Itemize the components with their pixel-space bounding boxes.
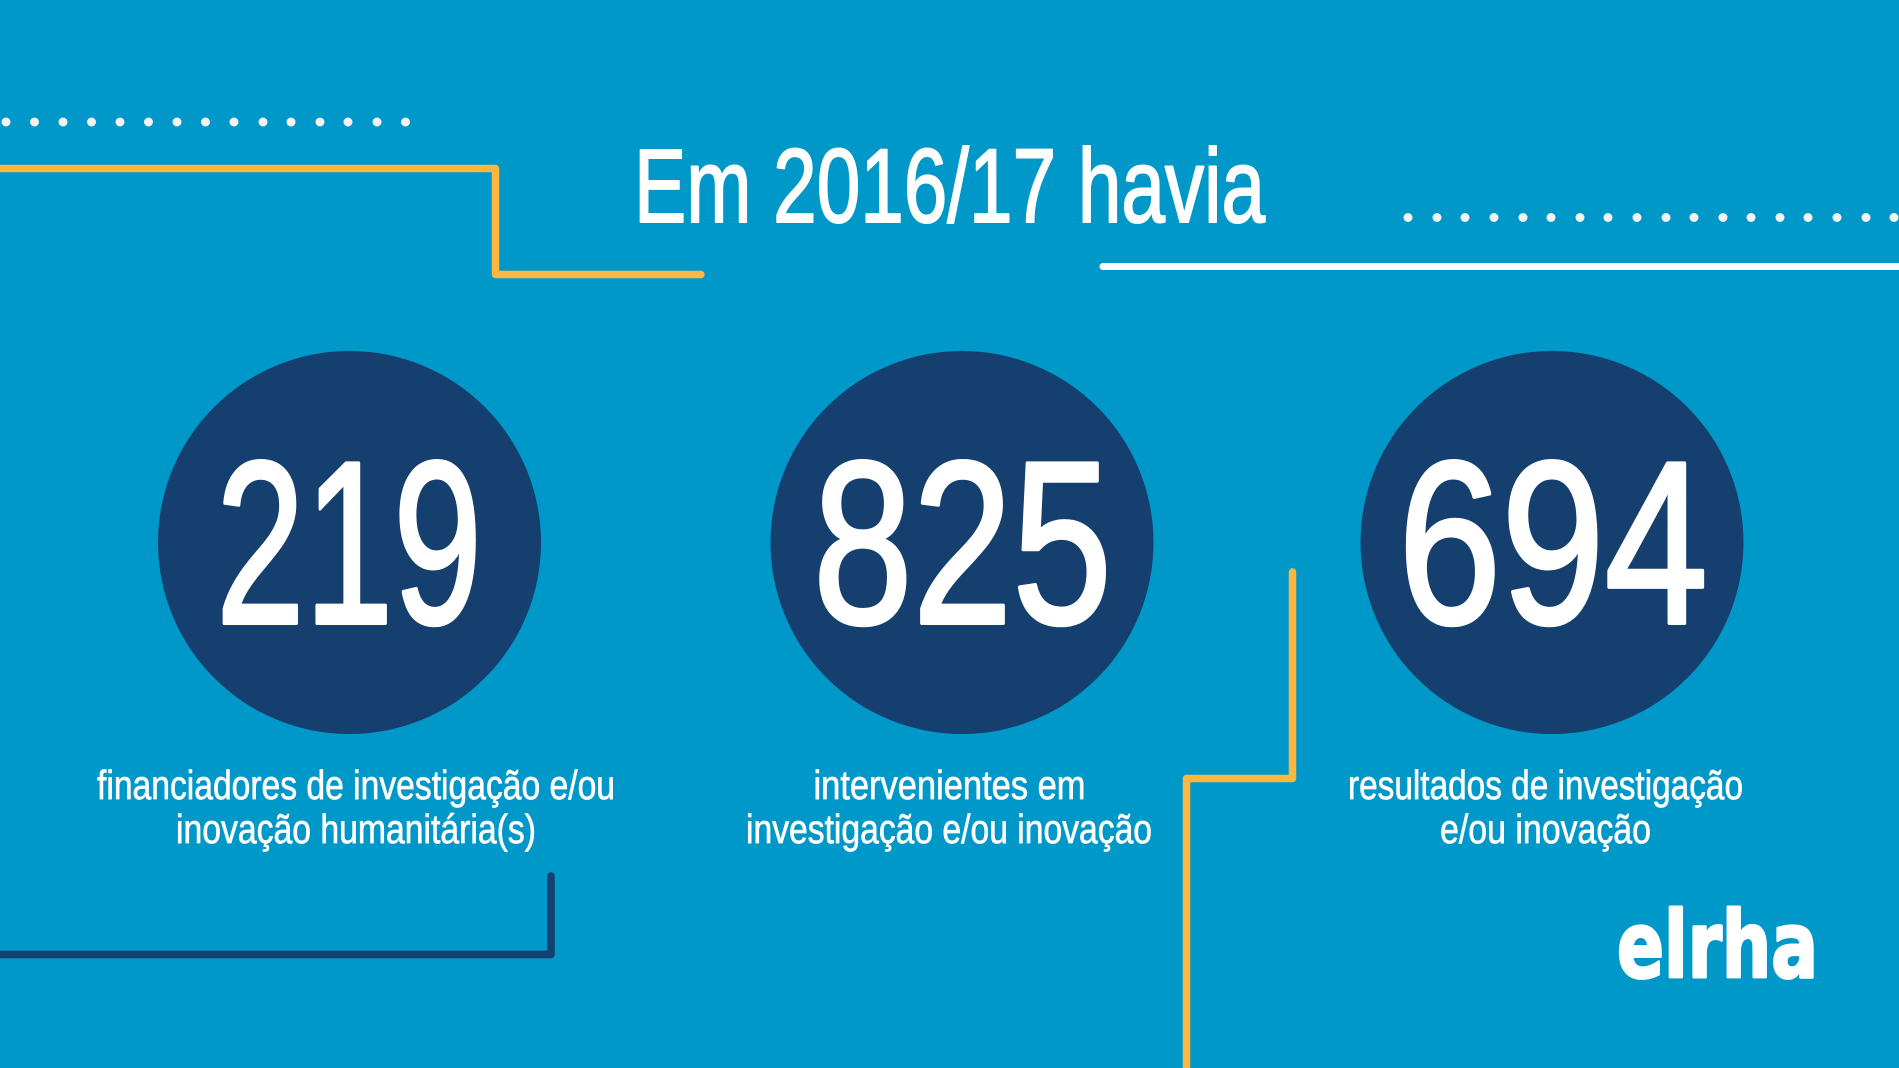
stat: 825 actors — [746, 351, 1154, 852]
circle: 825 — [770, 351, 1154, 734]
number: 694: 694 — [1398, 414, 1708, 673]
label: funders: financiadores de investigação e/ou — [97, 762, 615, 808]
label: outputs: resultados de investigação — [1348, 762, 1743, 808]
circle: 219 — [158, 351, 541, 734]
stat: 694 outputs — [1348, 351, 1744, 852]
logo: elrha: elrha — [1617, 892, 1818, 999]
title: Em 2016/17 havia — [634, 128, 1265, 245]
number: 825: 825 — [813, 414, 1112, 673]
white line: top right — [1103, 263, 1899, 270]
decorative dots: top right — [1404, 213, 1898, 222]
circle: 694 — [1360, 351, 1744, 734]
number: 219: 219 — [216, 414, 482, 673]
label: actors: investigação e/ou inovação — [746, 806, 1152, 852]
label: outputs: e/ou inovação — [1440, 806, 1651, 852]
label: funders: inovação humanitária(s) — [176, 806, 536, 852]
label: actors: intervenientes em — [814, 762, 1086, 808]
yellow stepped line: bottom right — [1186, 572, 1292, 1068]
navy stepped line: bottom left — [0, 876, 551, 954]
yellow stepped line: top left — [0, 168, 701, 274]
decorative dots: top left — [2, 118, 410, 126]
stat: 219 funders — [97, 351, 615, 852]
